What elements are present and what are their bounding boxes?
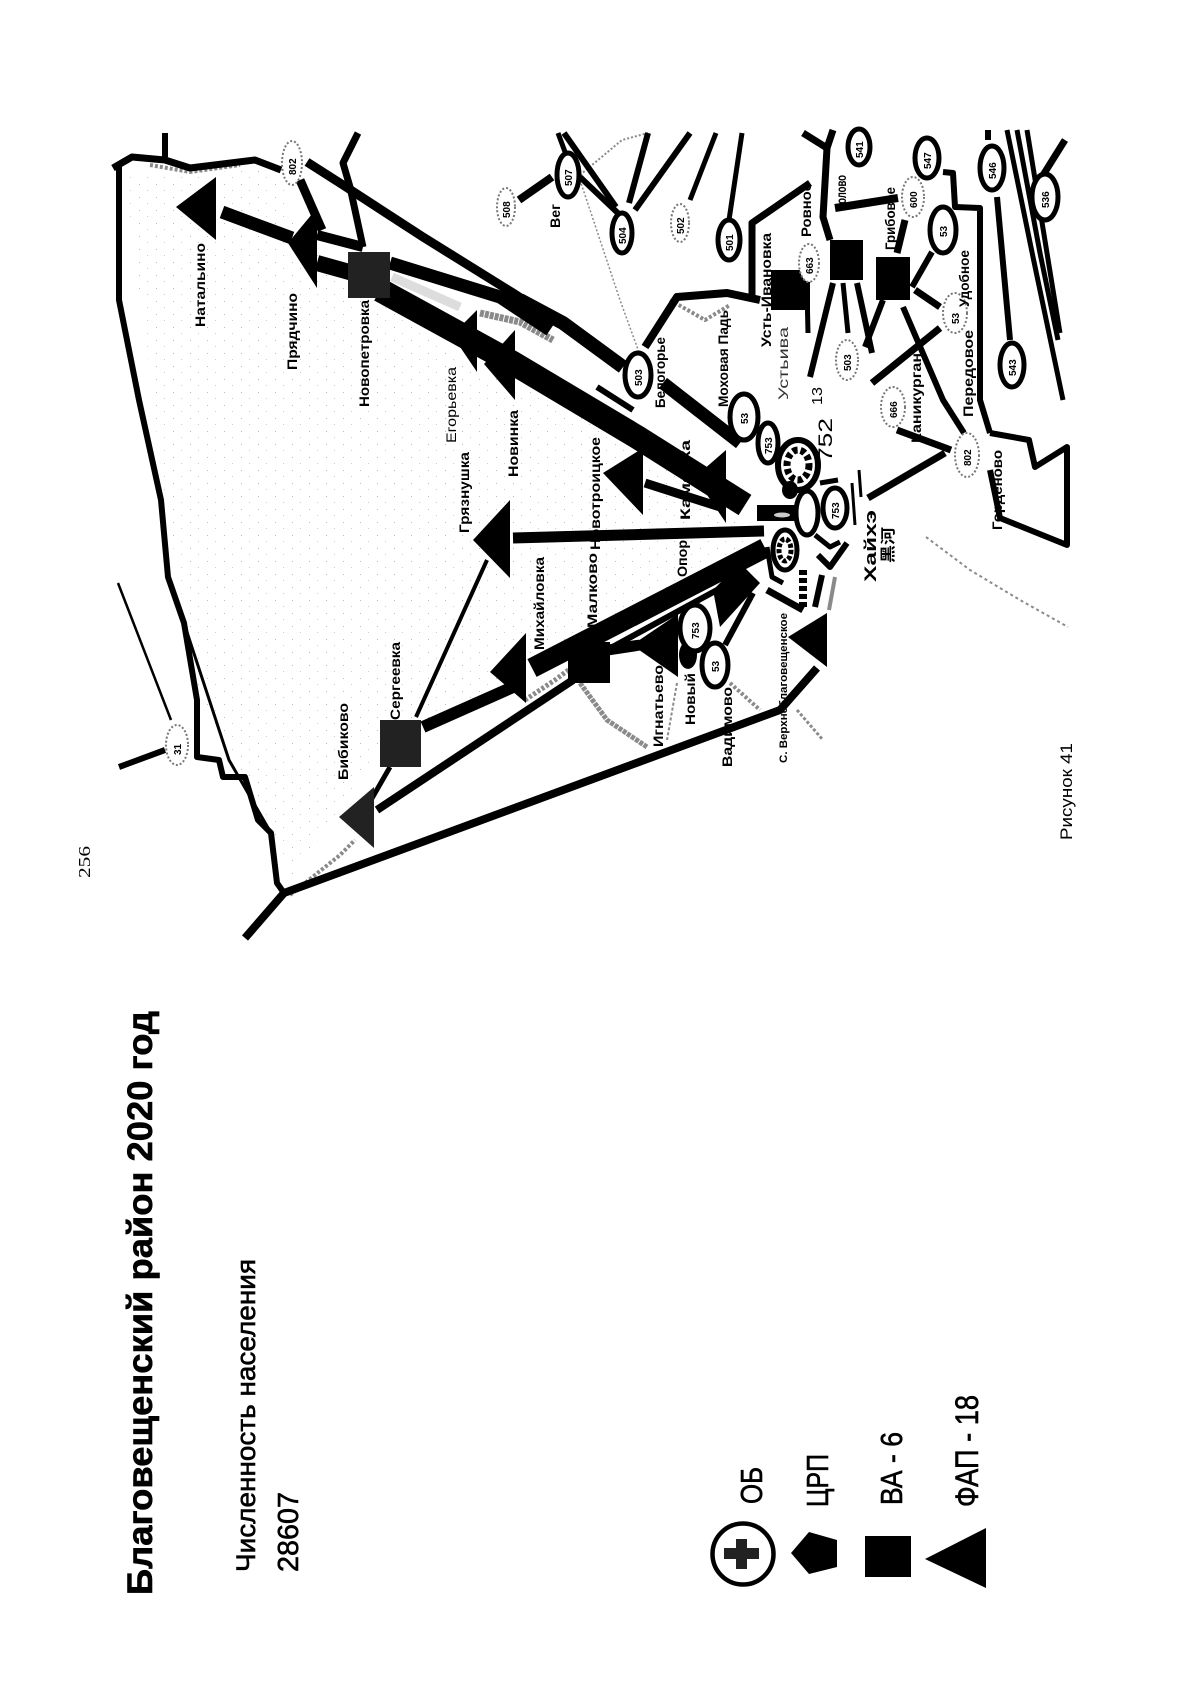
settlement ovals: 508 — [502, 201, 513, 218]
settlement labels: Грязнушка — [456, 452, 472, 533]
settlement ovals: 53 — [939, 225, 950, 237]
settlement labels: 黑河 — [880, 527, 897, 563]
settlement ovals: 507 — [564, 169, 575, 186]
settlement labels: Ролово — [833, 175, 849, 210]
population block: 28607 — [273, 1492, 305, 1572]
settlement ovals: 666 — [889, 401, 900, 418]
settlement labels: Опор — [674, 540, 690, 577]
settlement ovals: 502 — [676, 217, 687, 234]
settlement labels: Горденово — [989, 450, 1005, 530]
legend label FAP: ФАП - 18 — [949, 1395, 985, 1507]
settlement labels: Усть-Ивановка — [758, 233, 774, 347]
figure caption: Рисунок 41 — [1057, 743, 1076, 840]
legend label CRP: ЦРП — [800, 1454, 835, 1507]
settlement labels: Удобное — [956, 250, 972, 307]
settlement labels: Егорьевка — [443, 367, 459, 443]
settlement ovals: 541 — [855, 141, 866, 158]
settlement labels: Каменка — [677, 440, 693, 520]
settlement ovals: 504 — [618, 227, 629, 244]
icon: feldsher station — [925, 1528, 986, 1588]
settlement ovals: 53 — [951, 312, 962, 324]
icon: outpatient clinic — [865, 1536, 911, 1577]
settlement ovals: 501 — [725, 234, 736, 251]
settlement ovals: 547 — [923, 152, 934, 169]
settlement ovals: 53 — [740, 412, 751, 424]
settlement ovals: 543 — [1008, 359, 1019, 376]
settlement labels: Натальино — [192, 243, 208, 327]
icon: regional hospital — [712, 1524, 774, 1584]
settlement labels: Каникурган — [908, 353, 924, 443]
settlement labels: Белогорье — [652, 337, 668, 408]
central city cluster: 753 — [764, 437, 775, 454]
settlement labels: Устьива — [775, 327, 791, 400]
settlement labels: Новопетровка — [356, 300, 372, 407]
roads: north-east network — [519, 130, 1065, 433]
map — [113, 129, 1068, 938]
roads: western corridor — [371, 531, 835, 810]
settlement labels: Сергеевка — [387, 642, 403, 720]
legend — [712, 1395, 986, 1588]
central city cluster — [757, 423, 861, 610]
settlement labels: 13 — [809, 387, 826, 405]
settlement labels: Ровное — [798, 183, 814, 237]
rivers and light lines — [150, 133, 1068, 895]
settlement labels: Новотроицкое — [587, 437, 603, 550]
settlement labels: Михайловка — [531, 557, 547, 650]
settlement ovals: 663 — [805, 257, 816, 274]
settlement labels: Передовое — [960, 330, 976, 417]
settlement ovals: 503 — [843, 354, 854, 371]
icon: central district hospital — [791, 1532, 837, 1574]
settlement ovals: 802 — [963, 449, 974, 466]
settlement labels: Новый — [682, 673, 698, 725]
legend label VA: ВА - 6 — [874, 1432, 909, 1505]
feldsher stations — [176, 177, 827, 848]
settlement labels: Грибовое — [882, 187, 898, 250]
central city cluster: 753 — [831, 502, 842, 519]
settlement labels: Хайхэ — [861, 510, 880, 582]
roads: northern corridor — [222, 162, 951, 507]
settlement labels: Новинка — [505, 410, 521, 477]
legend label OB: ОБ — [734, 1467, 769, 1504]
settlement ovals — [166, 129, 1058, 765]
settlement ovals: 53 — [711, 660, 722, 672]
population block — [231, 1259, 305, 1572]
settlement ovals: 753 — [691, 622, 702, 639]
page number: 256 — [75, 846, 94, 878]
settlement ovals: 546 — [988, 162, 999, 179]
district border — [113, 133, 1067, 938]
title: Благовещенский район 2020 год — [121, 1011, 160, 1595]
settlement labels: С. Верхнеблаговещенское — [778, 613, 790, 763]
settlement labels: Моховая Падь — [715, 310, 731, 407]
settlement ovals: 802 — [288, 158, 299, 175]
settlement labels: Вадимово — [719, 687, 735, 767]
settlement labels — [192, 175, 1005, 780]
settlement ovals: 600 — [909, 191, 920, 208]
settlement ovals: 503 — [634, 369, 645, 386]
settlement ovals: 536 — [1041, 191, 1052, 208]
settlement ovals: 31 — [173, 743, 184, 755]
settlement labels: Игнатьево — [650, 665, 666, 747]
settlement labels: Бибиково — [335, 703, 351, 780]
settlement labels: 752 — [816, 418, 837, 462]
settlement labels: Малково — [584, 553, 600, 628]
settlement labels: Вег — [547, 204, 563, 228]
population block: Численность населения — [231, 1259, 261, 1572]
outpatient clinics — [348, 240, 910, 767]
settlement labels: Прядчино — [284, 293, 300, 370]
